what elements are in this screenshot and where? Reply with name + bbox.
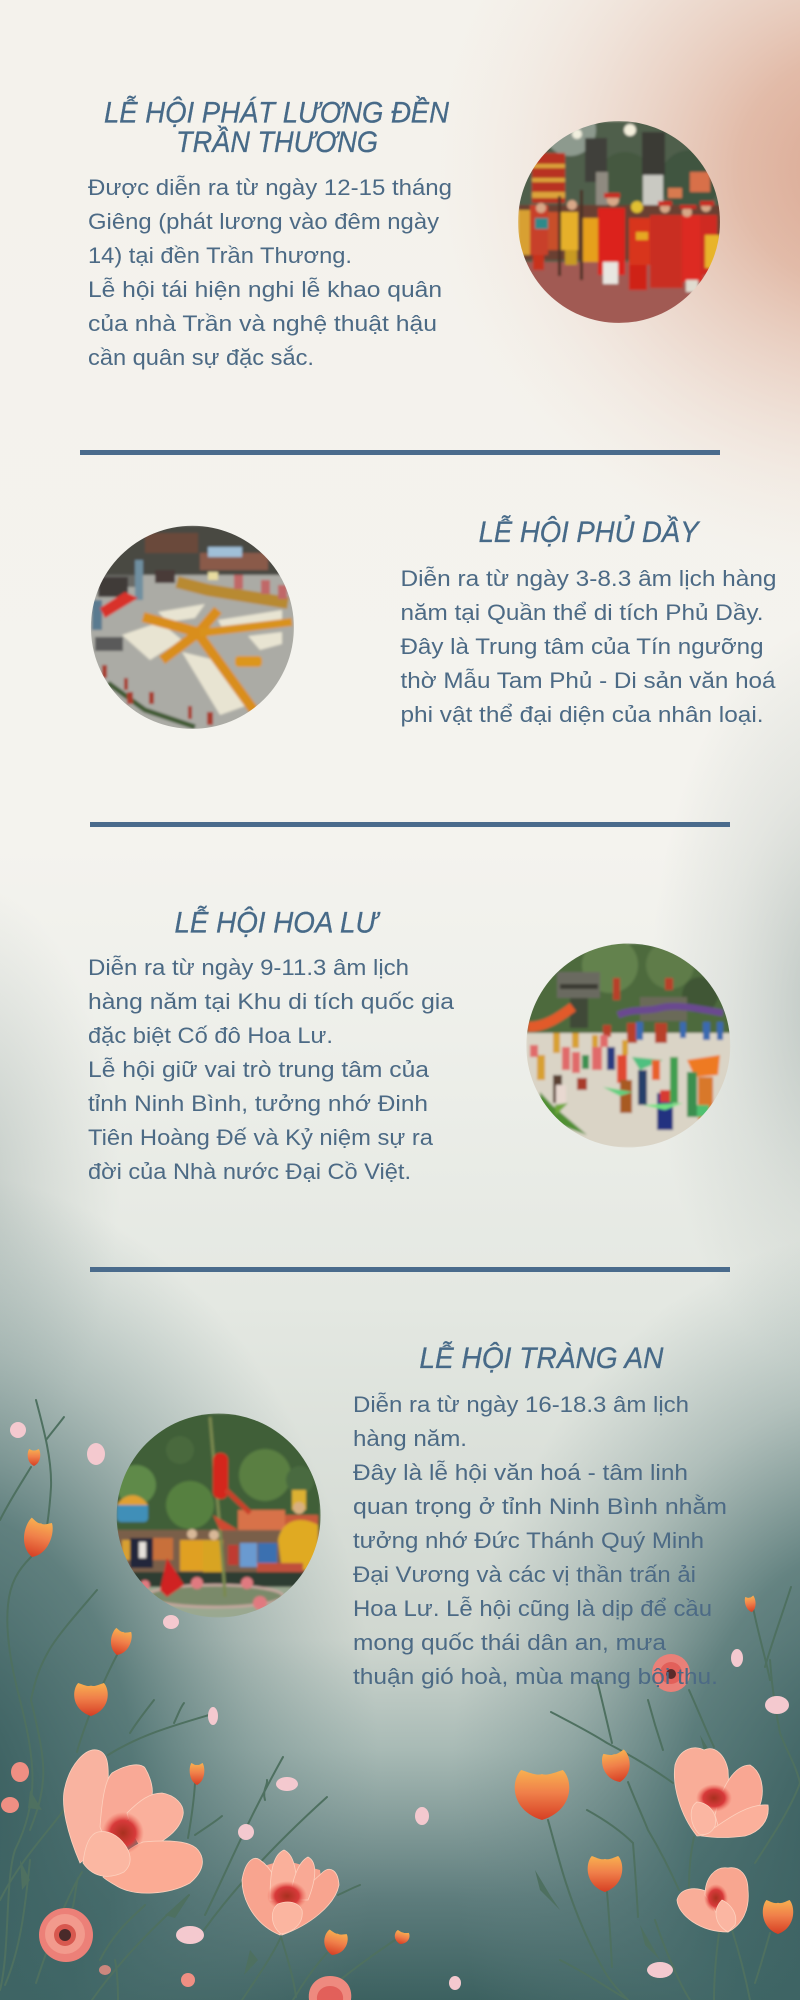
body text: thờ Mẫu Tam Phủ - Di sản văn hoá	[400, 668, 776, 693]
flowers and stems decoration	[0, 1400, 800, 2000]
body text: phi vật thể đại diện của nhân loại.	[400, 702, 764, 727]
body text: Được diễn ra từ ngày 12-15 tháng	[88, 175, 452, 200]
title: LỄ HỘI PHÁT LƯƠNG ĐỀN	[104, 96, 449, 130]
body text: Hoa Lư. Lễ hội cũng là dịp để cầu	[353, 1596, 712, 1621]
body text: Diễn ra từ ngày 3-8.3 âm lịch hàng	[400, 566, 776, 591]
section 4: Tràng An	[116, 1341, 727, 1689]
body text: Đây là Trung tâm của Tín ngưỡng	[400, 634, 764, 659]
body text: cần quân sự đặc sắc.	[88, 345, 314, 370]
body text: Lễ hội giữ vai trò trung tâm của	[88, 1057, 430, 1082]
body text: hàng năm.	[353, 1426, 467, 1451]
body text: Đây là lễ hội văn hoá - tâm linh	[353, 1460, 688, 1485]
small coral buds	[1, 1762, 195, 1987]
body text: tỉnh Ninh Bình, tưởng nhớ Đinh	[88, 1091, 428, 1116]
section 1: Phát Lương	[88, 96, 721, 370]
body text: Giêng (phát lương vào đêm ngày	[88, 209, 440, 234]
body text: Diễn ra từ ngày 16-18.3 âm lịch	[353, 1392, 689, 1417]
leaves	[20, 1735, 745, 1975]
peach flower right upper	[674, 1748, 768, 1838]
section 3: Hoa Lư	[88, 906, 731, 1184]
peach flower right lower	[677, 1868, 748, 1932]
body text: Lễ hội tái hiện nghi lễ khao quân	[88, 277, 442, 302]
body text: tưởng nhớ Đức Thánh Quý Minh	[353, 1528, 704, 1553]
body text	[353, 1392, 727, 1689]
body text: quan trọng ở tỉnh Ninh Bình nhằm	[353, 1494, 727, 1519]
photo: Tràng An ceremony	[116, 1413, 321, 1618]
photo: Hoa Lư dancers	[526, 937, 731, 1148]
title: TRẦN THƯƠNG	[176, 125, 378, 159]
body text: của nhà Trần và nghệ thuật hậu	[88, 311, 437, 336]
flower stems	[0, 1400, 800, 2000]
small pink petals	[10, 1422, 789, 1990]
section 2: Phủ Dầy	[90, 514, 776, 730]
body text: Diễn ra từ ngày 9-11.3 âm lịch	[88, 955, 409, 980]
body text: đặc biệt Cố đô Hoa Lư.	[88, 1023, 333, 1048]
body text: hàng năm tại Khu di tích quốc gia	[88, 989, 455, 1014]
body text: 14) tại đền Trần Thương.	[88, 243, 352, 268]
body text: Tiên Hoàng Đế và Kỷ niệm sự ra	[88, 1125, 434, 1150]
photo: Phủ Dầy aerial ceremony	[90, 525, 295, 730]
title: LỄ HỘI PHỦ DẦY	[479, 514, 700, 549]
body text: mong quốc thái dân an, mưa	[353, 1630, 667, 1655]
title	[104, 96, 449, 159]
pink rose flowers	[39, 1654, 690, 2000]
body text: thuận gió hoà, mùa mang bội thu.	[353, 1664, 718, 1689]
photo: Trần Thương festival procession	[518, 104, 721, 324]
peach flower center	[242, 1850, 339, 1935]
orange tulips	[19, 1449, 793, 1958]
body text: năm tại Quần thể di tích Phủ Dầy.	[400, 600, 764, 625]
body text	[400, 566, 776, 727]
title: LỄ HỘI TRÀNG AN	[419, 1341, 664, 1375]
body text: Đại Vương và các vị thần trấn ải	[353, 1562, 696, 1587]
body text	[88, 955, 455, 1184]
body text: đời của Nhà nước Đại Cồ Việt.	[88, 1159, 411, 1184]
title: LỄ HỘI HOA LƯ	[174, 906, 380, 940]
body text	[88, 175, 452, 370]
large peach flower left	[63, 1750, 202, 1893]
